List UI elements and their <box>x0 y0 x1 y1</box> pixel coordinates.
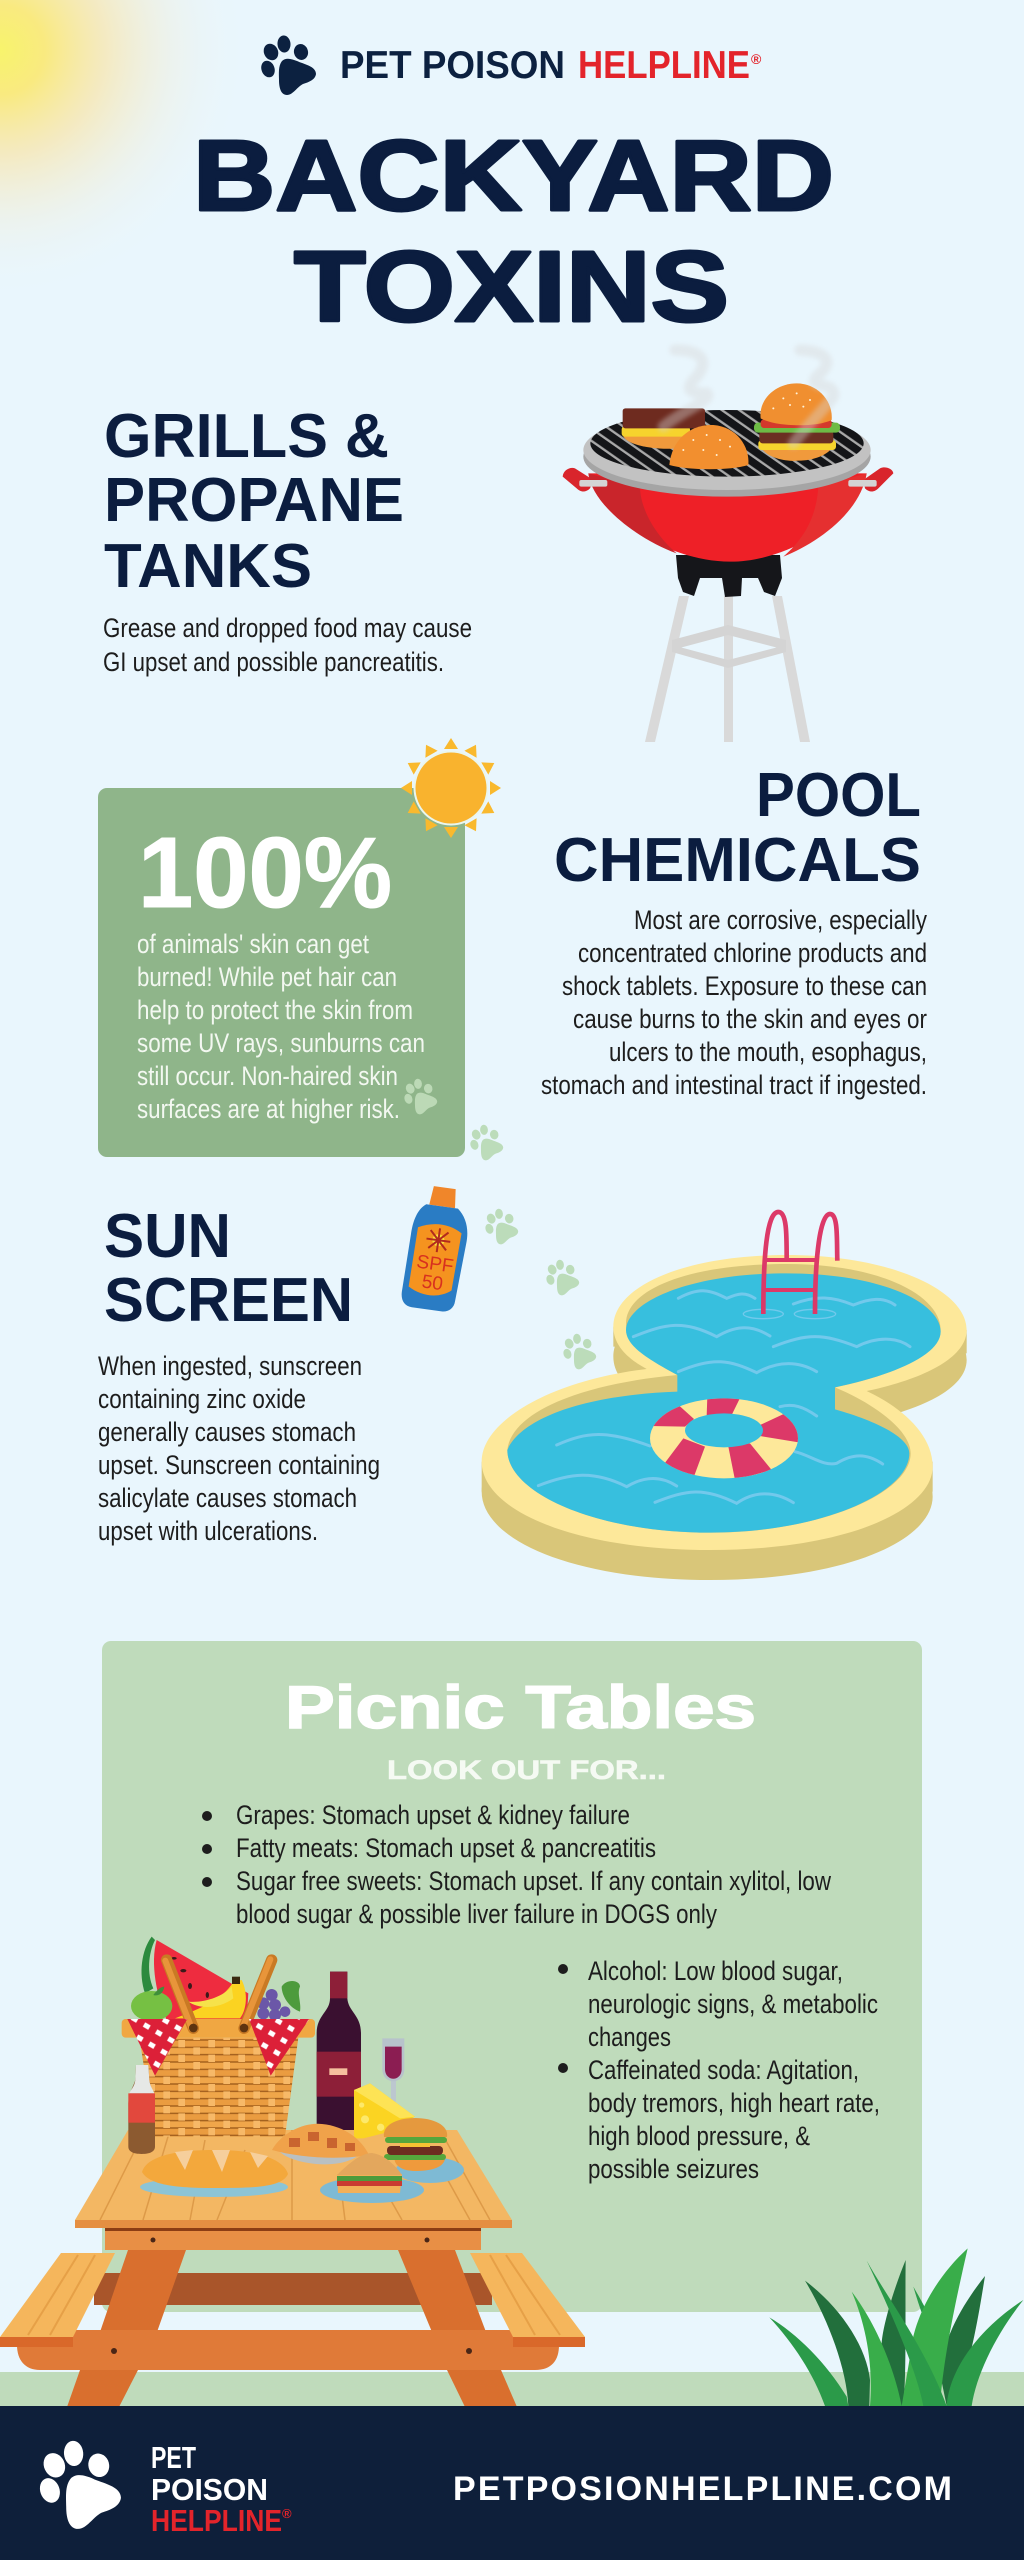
text: grills description: GI upset and possible pancreatitis. <box>103 647 444 677</box>
list: left column: Fatty meats: Stomach upset & pancreatitis <box>236 1833 656 1863</box>
rear beam <box>94 2273 492 2305</box>
illustration: picnic table <box>0 1937 585 2407</box>
heading: grills: PROPANE <box>104 466 404 535</box>
pool inner wall <box>507 1264 941 1533</box>
text: grills description: Grease and dropped food may cause <box>103 613 472 643</box>
panel: pool chemicals <box>541 761 927 1100</box>
text: pool description: stomach and intestinal tract if ingested. <box>541 1070 927 1100</box>
panel: sun screen <box>98 1202 380 1546</box>
table apron <box>105 2228 481 2250</box>
grill legs <box>645 596 810 742</box>
grill handles <box>563 467 893 491</box>
text: pool description: Most are corrosive, especially <box>634 905 927 935</box>
steak burger <box>622 408 705 449</box>
soda bottle <box>128 2065 155 2154</box>
icon: footer paw <box>37 2440 121 2529</box>
bun <box>669 425 748 469</box>
icon: sunscreen bottle: SPF <box>415 1252 455 1277</box>
rim and grate <box>583 417 871 497</box>
text: sunscreen description <box>98 1351 380 1546</box>
bowl <box>588 473 867 562</box>
grill bowl and food <box>563 350 893 562</box>
text: pool description: ulcers to the mouth, esophagus, <box>609 1037 927 1067</box>
panel: 100 percent card <box>98 738 501 1157</box>
icon: paw prints trail <box>469 1124 596 1369</box>
logo wordmark <box>340 44 762 87</box>
heading: grills: GRILLS & <box>104 402 389 471</box>
list: right column: body tremors, high heart rate, <box>588 2088 880 2118</box>
table lower legs <box>67 2370 517 2407</box>
text: sunscreen description: upset with ulcerations. <box>98 1516 318 1546</box>
text: pool description: cause burns to the skin and eyes or <box>573 1004 927 1034</box>
icon: sun <box>401 738 501 838</box>
heading: grills: TANKS <box>104 532 312 601</box>
list: left column <box>202 1800 831 1929</box>
apple <box>131 1987 172 2021</box>
text: sunburn note: help to protect the skin from <box>137 995 413 1025</box>
text: pool description <box>541 905 927 1100</box>
heading: sun screen <box>104 1202 353 1335</box>
table top <box>75 2130 512 2220</box>
footer wordmark: ® <box>282 2506 292 2521</box>
left bench <box>0 2253 115 2347</box>
metal brackets <box>579 480 877 487</box>
text: sunburn note: some UV rays, sunburns can <box>137 1028 425 1058</box>
text: grills description <box>103 613 472 677</box>
text: sunscreen description: upset. Sunscreen containing <box>98 1450 380 1480</box>
footer <box>0 2406 1024 2560</box>
wine glass <box>382 2038 404 2102</box>
text: sunscreen description: salicylate causes stomach <box>98 1483 357 1513</box>
front beam <box>17 2330 559 2370</box>
cheese <box>354 2083 415 2138</box>
text: sunburn note: surfaces are at higher risk. <box>137 1094 400 1124</box>
icon: grill <box>563 350 893 742</box>
list: right column <box>558 1956 880 2184</box>
subheading: look out for: LOOK OUT FOR... <box>387 1755 666 1785</box>
panel: grills and propane tanks <box>103 402 472 677</box>
pool water <box>507 1273 941 1533</box>
basket body <box>139 2038 298 2137</box>
illustration: grass <box>769 2248 1023 2406</box>
text: sunburn note <box>137 929 425 1124</box>
footer wordmark: POISON <box>151 2472 268 2507</box>
text: sunburn note: still occur. Non-haired skin <box>137 1061 398 1091</box>
card background <box>98 788 465 1157</box>
text: sunburn note: burned! While pet hair can <box>137 962 397 992</box>
icon: card paw <box>403 1078 437 1114</box>
wine bottle <box>317 1972 361 2130</box>
pie <box>272 2124 369 2164</box>
logo wordmark: HELPLINE <box>578 44 750 87</box>
list: right column: Caffeinated soda: Agitation, <box>588 2055 859 2085</box>
burger <box>384 2118 447 2171</box>
text: sunscreen description: When ingested, sunscreen <box>98 1351 362 1381</box>
burger plate <box>396 2157 464 2183</box>
burger <box>754 383 840 461</box>
grape leaf <box>282 1981 300 2012</box>
icon: swimming pool <box>482 1212 967 1580</box>
list: right column: neurologic signs, & metabolic <box>588 1989 878 2019</box>
basket handles <box>165 1959 272 2032</box>
list: right column: high blood pressure, & <box>588 2121 810 2151</box>
heading: grills <box>104 402 404 601</box>
list: left column: blood sugar & possible liver failure in DOGS only <box>236 1899 717 1929</box>
logo wordmark: PET POISON <box>340 44 565 87</box>
list: right column: Alcohol: Low blood sugar, <box>588 1956 843 1986</box>
text: sunscreen description: generally causes stomach <box>98 1417 356 1447</box>
text: sunburn note: of animals' skin can get <box>137 929 369 959</box>
ground band <box>0 2372 1024 2408</box>
grapes <box>257 1989 290 2021</box>
footer wordmark: HELPLINE <box>151 2503 282 2538</box>
sandwich <box>337 2153 402 2193</box>
list: left column: Grapes: Stomach upset & kidney failure <box>236 1800 630 1830</box>
picnic basket with fruit, bottles, cheese <box>122 1937 415 2154</box>
watermelon <box>142 1937 248 2020</box>
checkered cloths <box>127 2019 187 2076</box>
heading: pool chemicals: CHEMICALS <box>554 826 921 895</box>
icon: sunscreen bottle <box>400 1184 474 1313</box>
water ripples <box>538 1291 910 1503</box>
bananas <box>175 1977 246 2018</box>
text: sunscreen description: containing zinc oxide <box>98 1384 306 1414</box>
heading: pool chemicals: POOL <box>756 761 921 830</box>
basket rim <box>122 2019 315 2038</box>
sun glow corner <box>0 0 260 300</box>
text: pool description: concentrated chlorine products and <box>578 938 927 968</box>
pool ladder <box>763 1212 837 1314</box>
list: right column: changes <box>588 2022 671 2052</box>
list: left column: Sugar free sweets: Stomach upset. If any contain xylitol, low <box>236 1866 831 1896</box>
heading: picnic tables: Picnic Tables <box>285 1674 756 1741</box>
smoke <box>663 350 834 443</box>
table upper legs <box>100 2250 486 2332</box>
bread <box>142 2150 288 2188</box>
pool side <box>482 1285 967 1580</box>
bread plate <box>140 2177 288 2197</box>
icon: sunscreen bottle: 50 <box>420 1271 444 1295</box>
grill black supports <box>676 555 782 597</box>
heading: sun screen: SCREEN <box>104 1266 353 1335</box>
heading: pool chemicals <box>554 761 921 895</box>
icon: paw logo <box>259 35 316 95</box>
list: right column: possible seizures <box>588 2154 759 2184</box>
website url: PETPOSIONHELPLINE.COM <box>453 2470 952 2508</box>
ladder water rings <box>743 1309 836 1319</box>
heading: sun screen: SUN <box>104 1202 231 1271</box>
footer wordmark <box>151 2440 292 2538</box>
pool coping <box>482 1255 967 1550</box>
title: TOXINS <box>294 231 729 343</box>
card background <box>102 1641 922 2312</box>
logo wordmark: ® <box>751 51 762 67</box>
text: pool description: shock tablets. Exposure to these can <box>562 971 927 1001</box>
pool ring <box>648 1397 803 1480</box>
footer wordmark: PET <box>151 2440 196 2475</box>
panel: picnic tables <box>102 1641 922 2312</box>
big stat: 100% <box>138 817 392 929</box>
sandwich plate <box>320 2177 424 2203</box>
right bench <box>470 2253 585 2347</box>
title: BACKYARD <box>193 120 834 232</box>
title <box>193 120 834 343</box>
header logo <box>259 35 762 95</box>
footer background <box>0 2406 1024 2560</box>
